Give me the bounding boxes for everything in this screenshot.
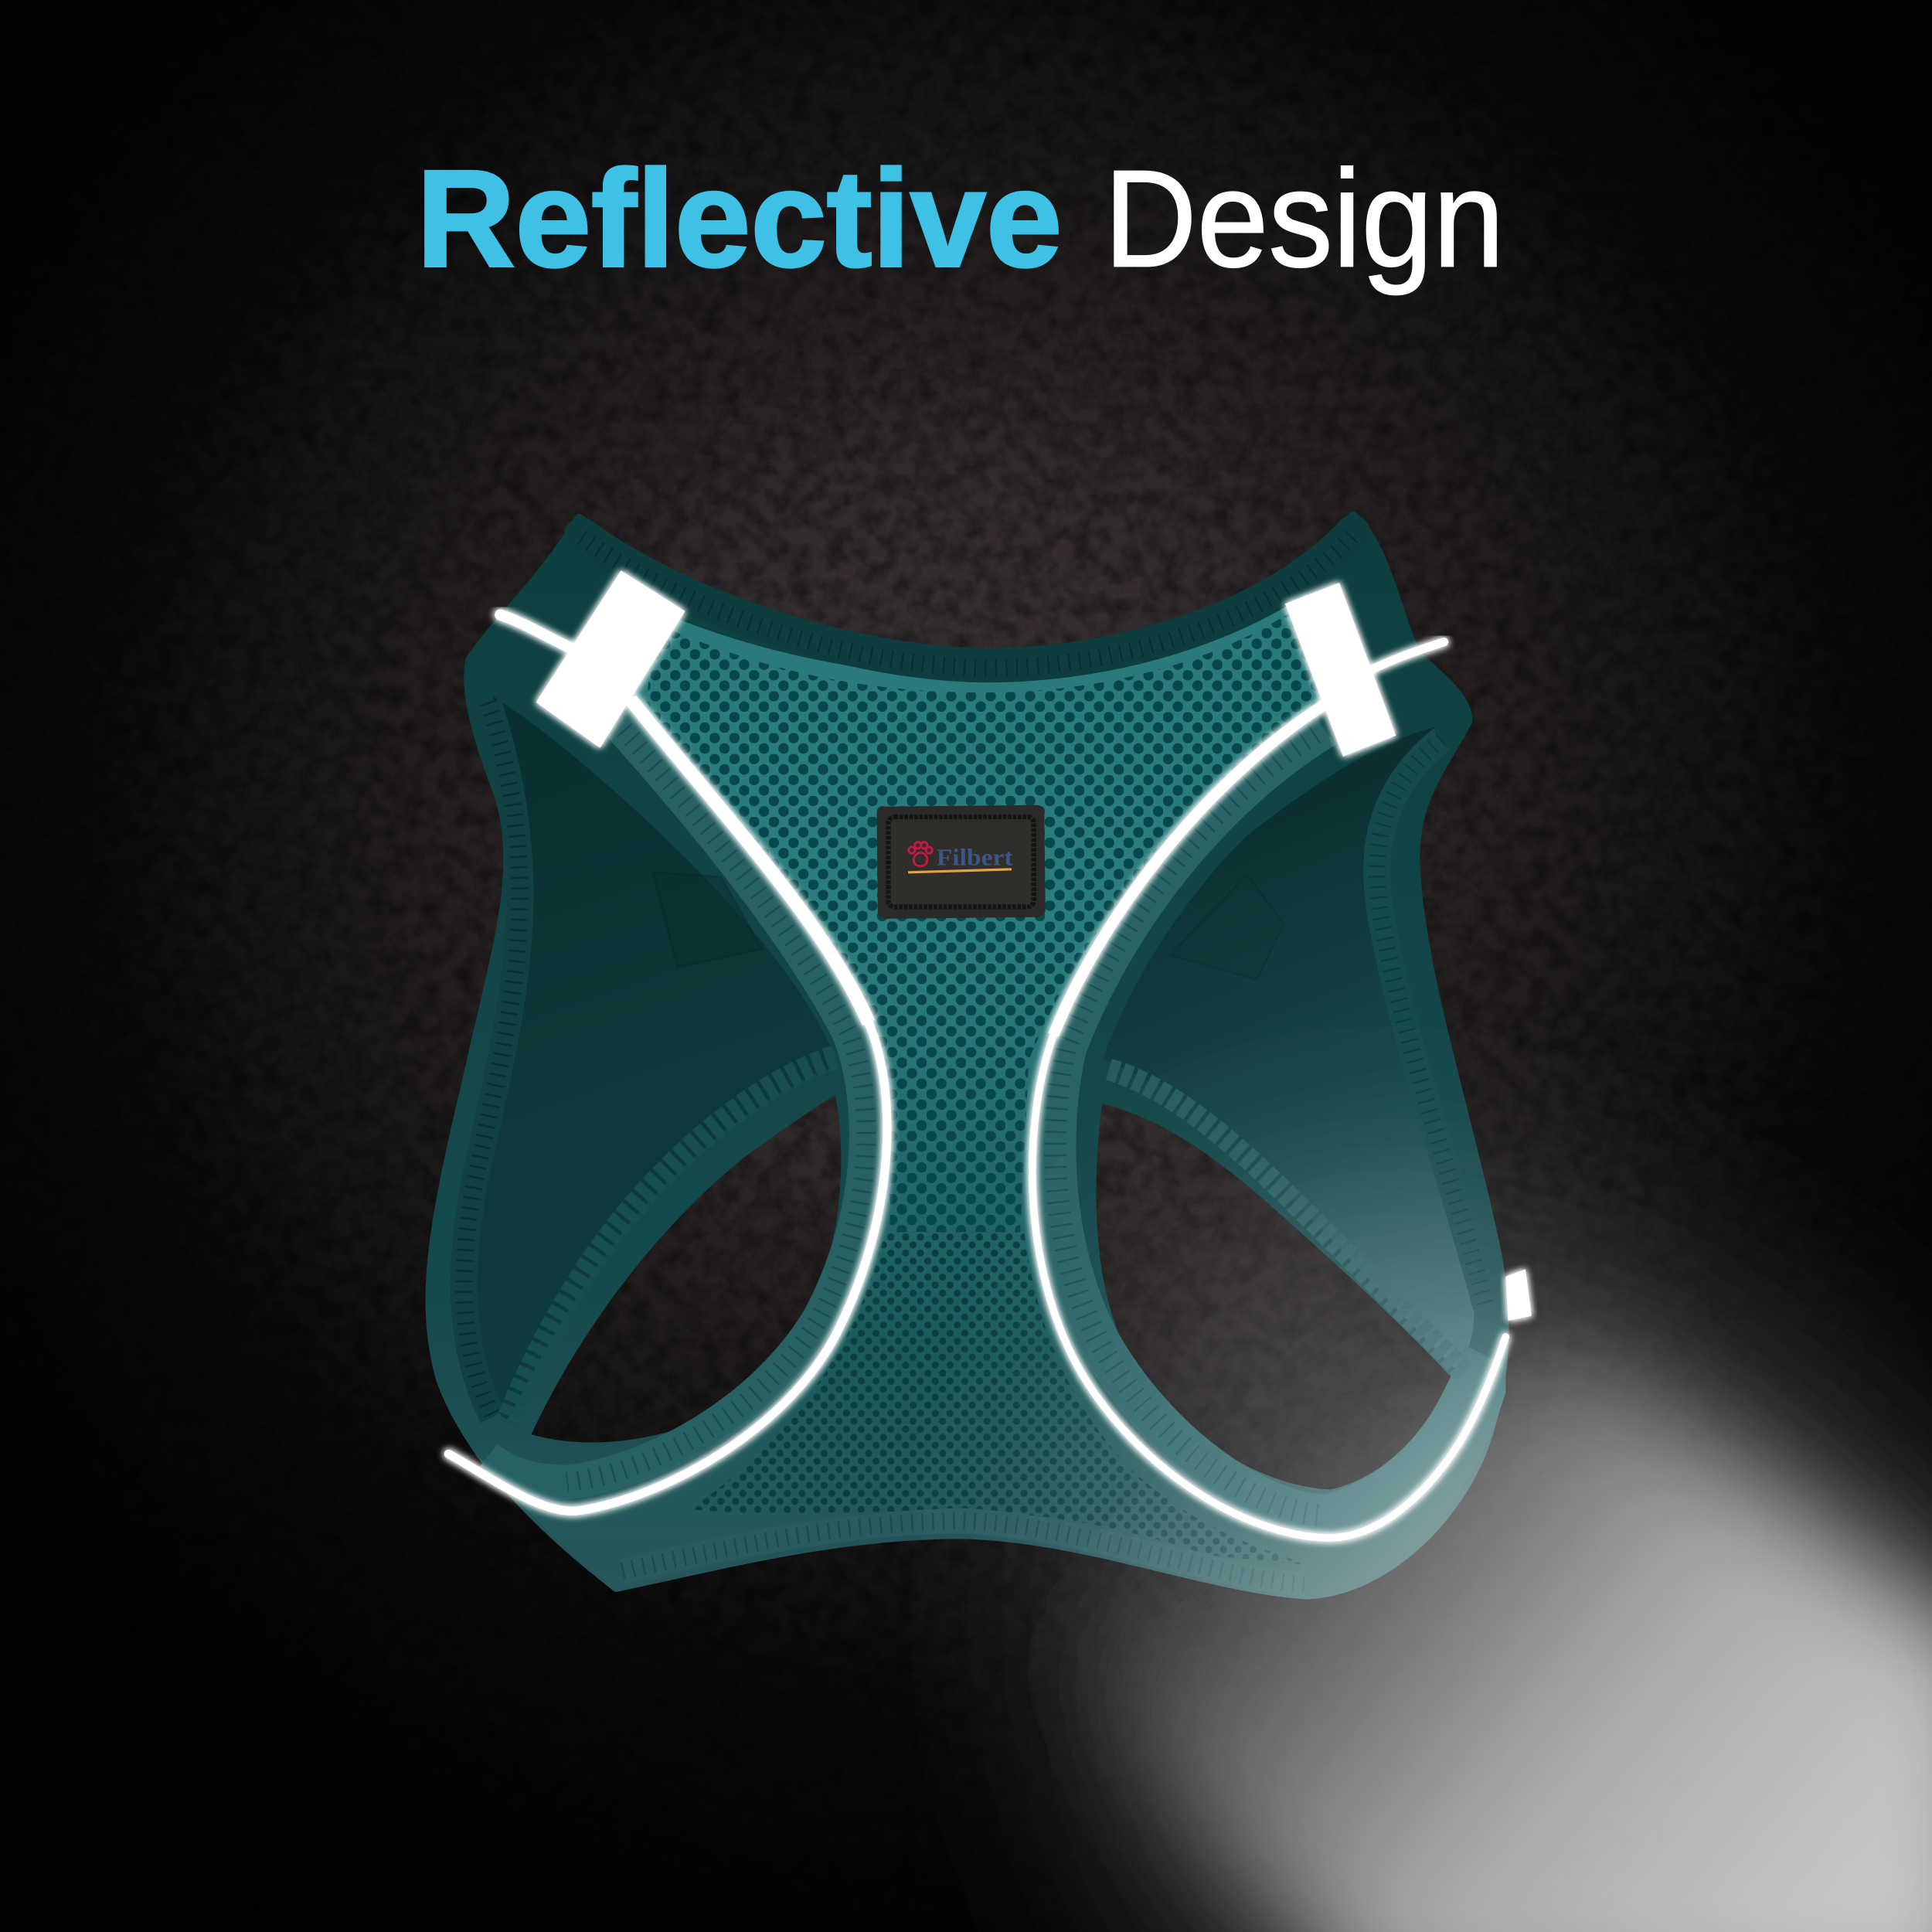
reflective thread right (1366, 642, 1444, 673)
right inner fabric (1103, 727, 1474, 1368)
reflective piping right (1032, 702, 1505, 1538)
reflective tab lower right (1505, 1269, 1532, 1321)
brand name: Filbert (937, 844, 1013, 870)
left arm hole binding (487, 721, 866, 1482)
harness (429, 515, 1532, 1600)
reflective patch left (536, 570, 685, 748)
left inner fabric (472, 696, 838, 1423)
title word: Reflective: Reflective (417, 141, 1062, 295)
bottom binding (622, 1520, 1306, 1584)
inner lower left trim (508, 1057, 835, 1423)
paw icon (909, 842, 932, 866)
right inner binding (1377, 740, 1486, 1306)
title word: Design: Design (1104, 141, 1505, 295)
reflective patch right (1285, 583, 1396, 757)
left inner binding (464, 702, 520, 1417)
inner lower right trim (1109, 1070, 1466, 1374)
brand underline (908, 869, 1012, 872)
title (417, 141, 1505, 295)
left pocket loop (653, 872, 761, 968)
right arm hole binding (1055, 727, 1485, 1515)
brand label (876, 805, 1046, 919)
reflective thread left (500, 615, 582, 653)
flashlight beam (1084, 1200, 1932, 1932)
neck binding (582, 532, 1353, 665)
harness silhouette with arm openings (429, 515, 1505, 1596)
right pocket loop (1171, 875, 1284, 980)
mesh centre panel (474, 591, 1505, 1600)
reflective piping left (448, 700, 887, 1511)
